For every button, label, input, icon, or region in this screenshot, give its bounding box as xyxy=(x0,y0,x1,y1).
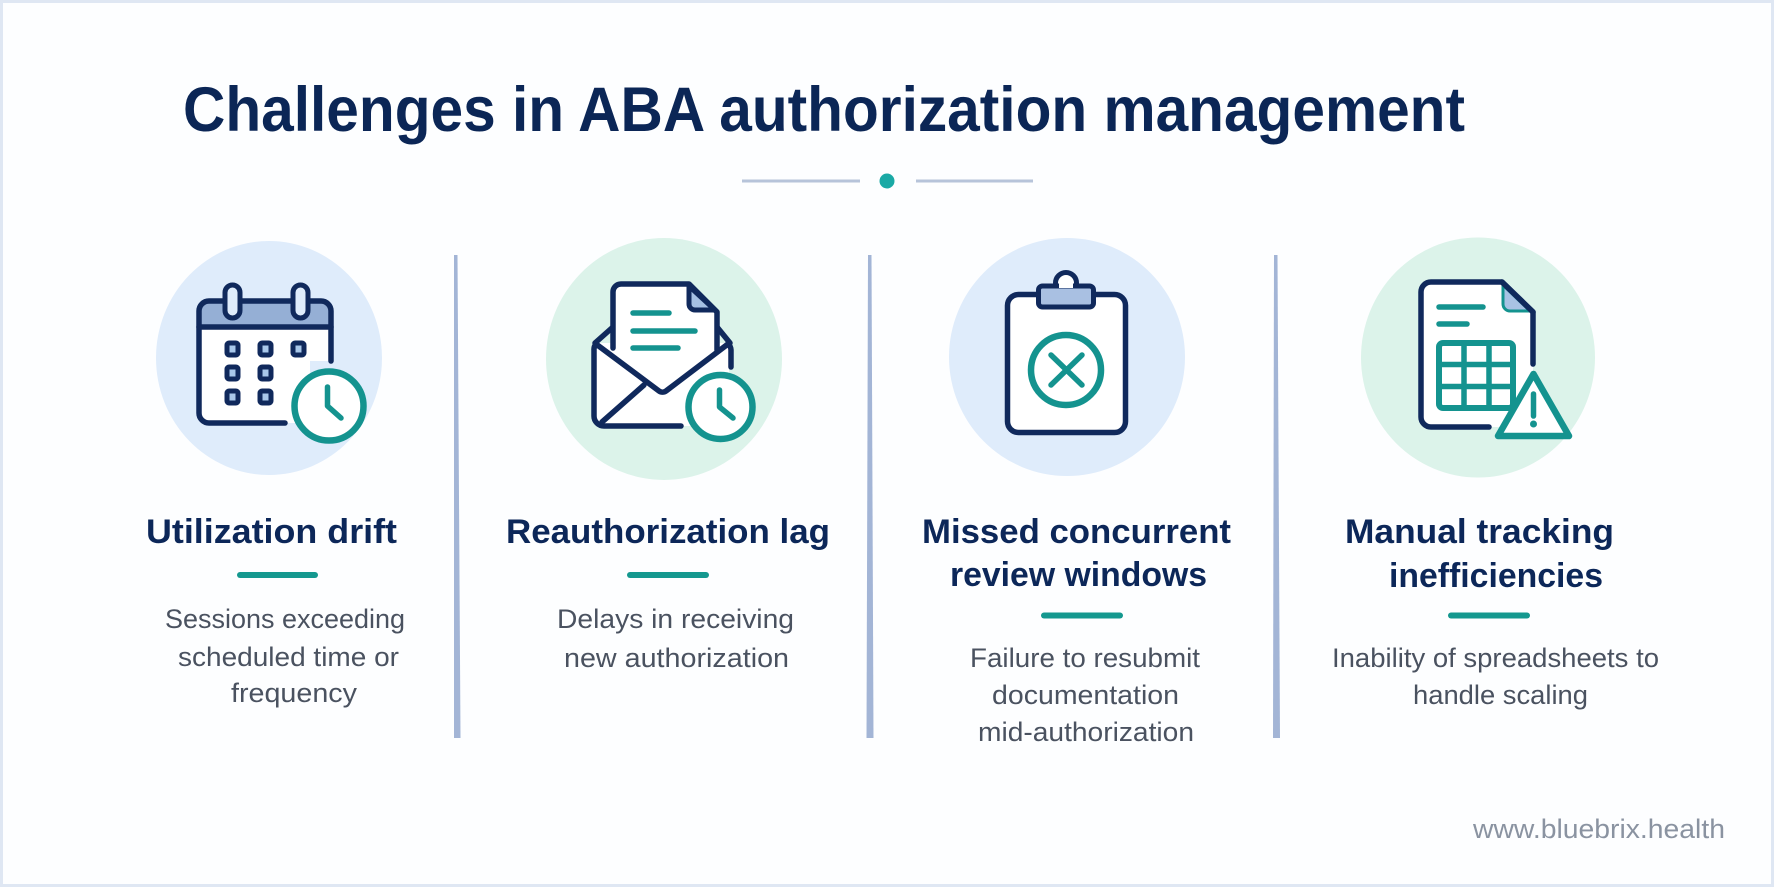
description: Delays in receiving xyxy=(557,604,794,634)
panel: manual tracking inefficiencies xyxy=(1332,238,1659,710)
heading: Missed concurrent xyxy=(922,513,1232,551)
divider 1 xyxy=(454,255,460,738)
heading xyxy=(1345,513,1614,595)
panel: reauthorization lag xyxy=(506,238,830,673)
description: documentation xyxy=(992,680,1179,710)
description: Failure to resubmit xyxy=(970,643,1200,673)
accent bar xyxy=(1448,612,1530,618)
divider 3 xyxy=(1273,255,1280,738)
heading: Reauthorization lag xyxy=(506,513,830,551)
description: Sessions exceeding xyxy=(165,604,405,634)
panel: missed concurrent review windows xyxy=(922,238,1232,747)
icon: calendar with clock xyxy=(156,241,382,475)
description: handle scaling xyxy=(1413,680,1588,710)
accent bar xyxy=(627,572,709,578)
description xyxy=(970,643,1200,747)
description: new authorization xyxy=(564,643,789,673)
website footer: www.bluebrix.health xyxy=(1472,814,1725,844)
description xyxy=(557,604,794,673)
description: mid-authorization xyxy=(978,717,1194,747)
accent bar xyxy=(1041,612,1123,618)
heading: Utilization drift xyxy=(146,513,398,551)
heading: inefficiencies xyxy=(1389,557,1603,595)
heading xyxy=(922,513,1232,594)
description xyxy=(165,604,405,708)
title ornament xyxy=(742,174,1033,188)
heading: review windows xyxy=(950,556,1207,594)
icon: envelope with letter and clock xyxy=(546,238,782,480)
description: Inability of spreadsheets to xyxy=(1332,643,1659,673)
description xyxy=(1332,643,1659,710)
panel: utilization drift xyxy=(146,241,405,708)
description: frequency xyxy=(231,678,358,708)
icon: clipboard with x xyxy=(949,238,1185,476)
divider 2 xyxy=(866,255,874,738)
description: scheduled time or xyxy=(178,642,399,672)
heading: Manual tracking xyxy=(1345,513,1614,551)
icon: spreadsheet with warning xyxy=(1361,238,1595,478)
title: Challenges in ABA authorization management xyxy=(183,75,1465,145)
accent bar xyxy=(237,572,318,578)
